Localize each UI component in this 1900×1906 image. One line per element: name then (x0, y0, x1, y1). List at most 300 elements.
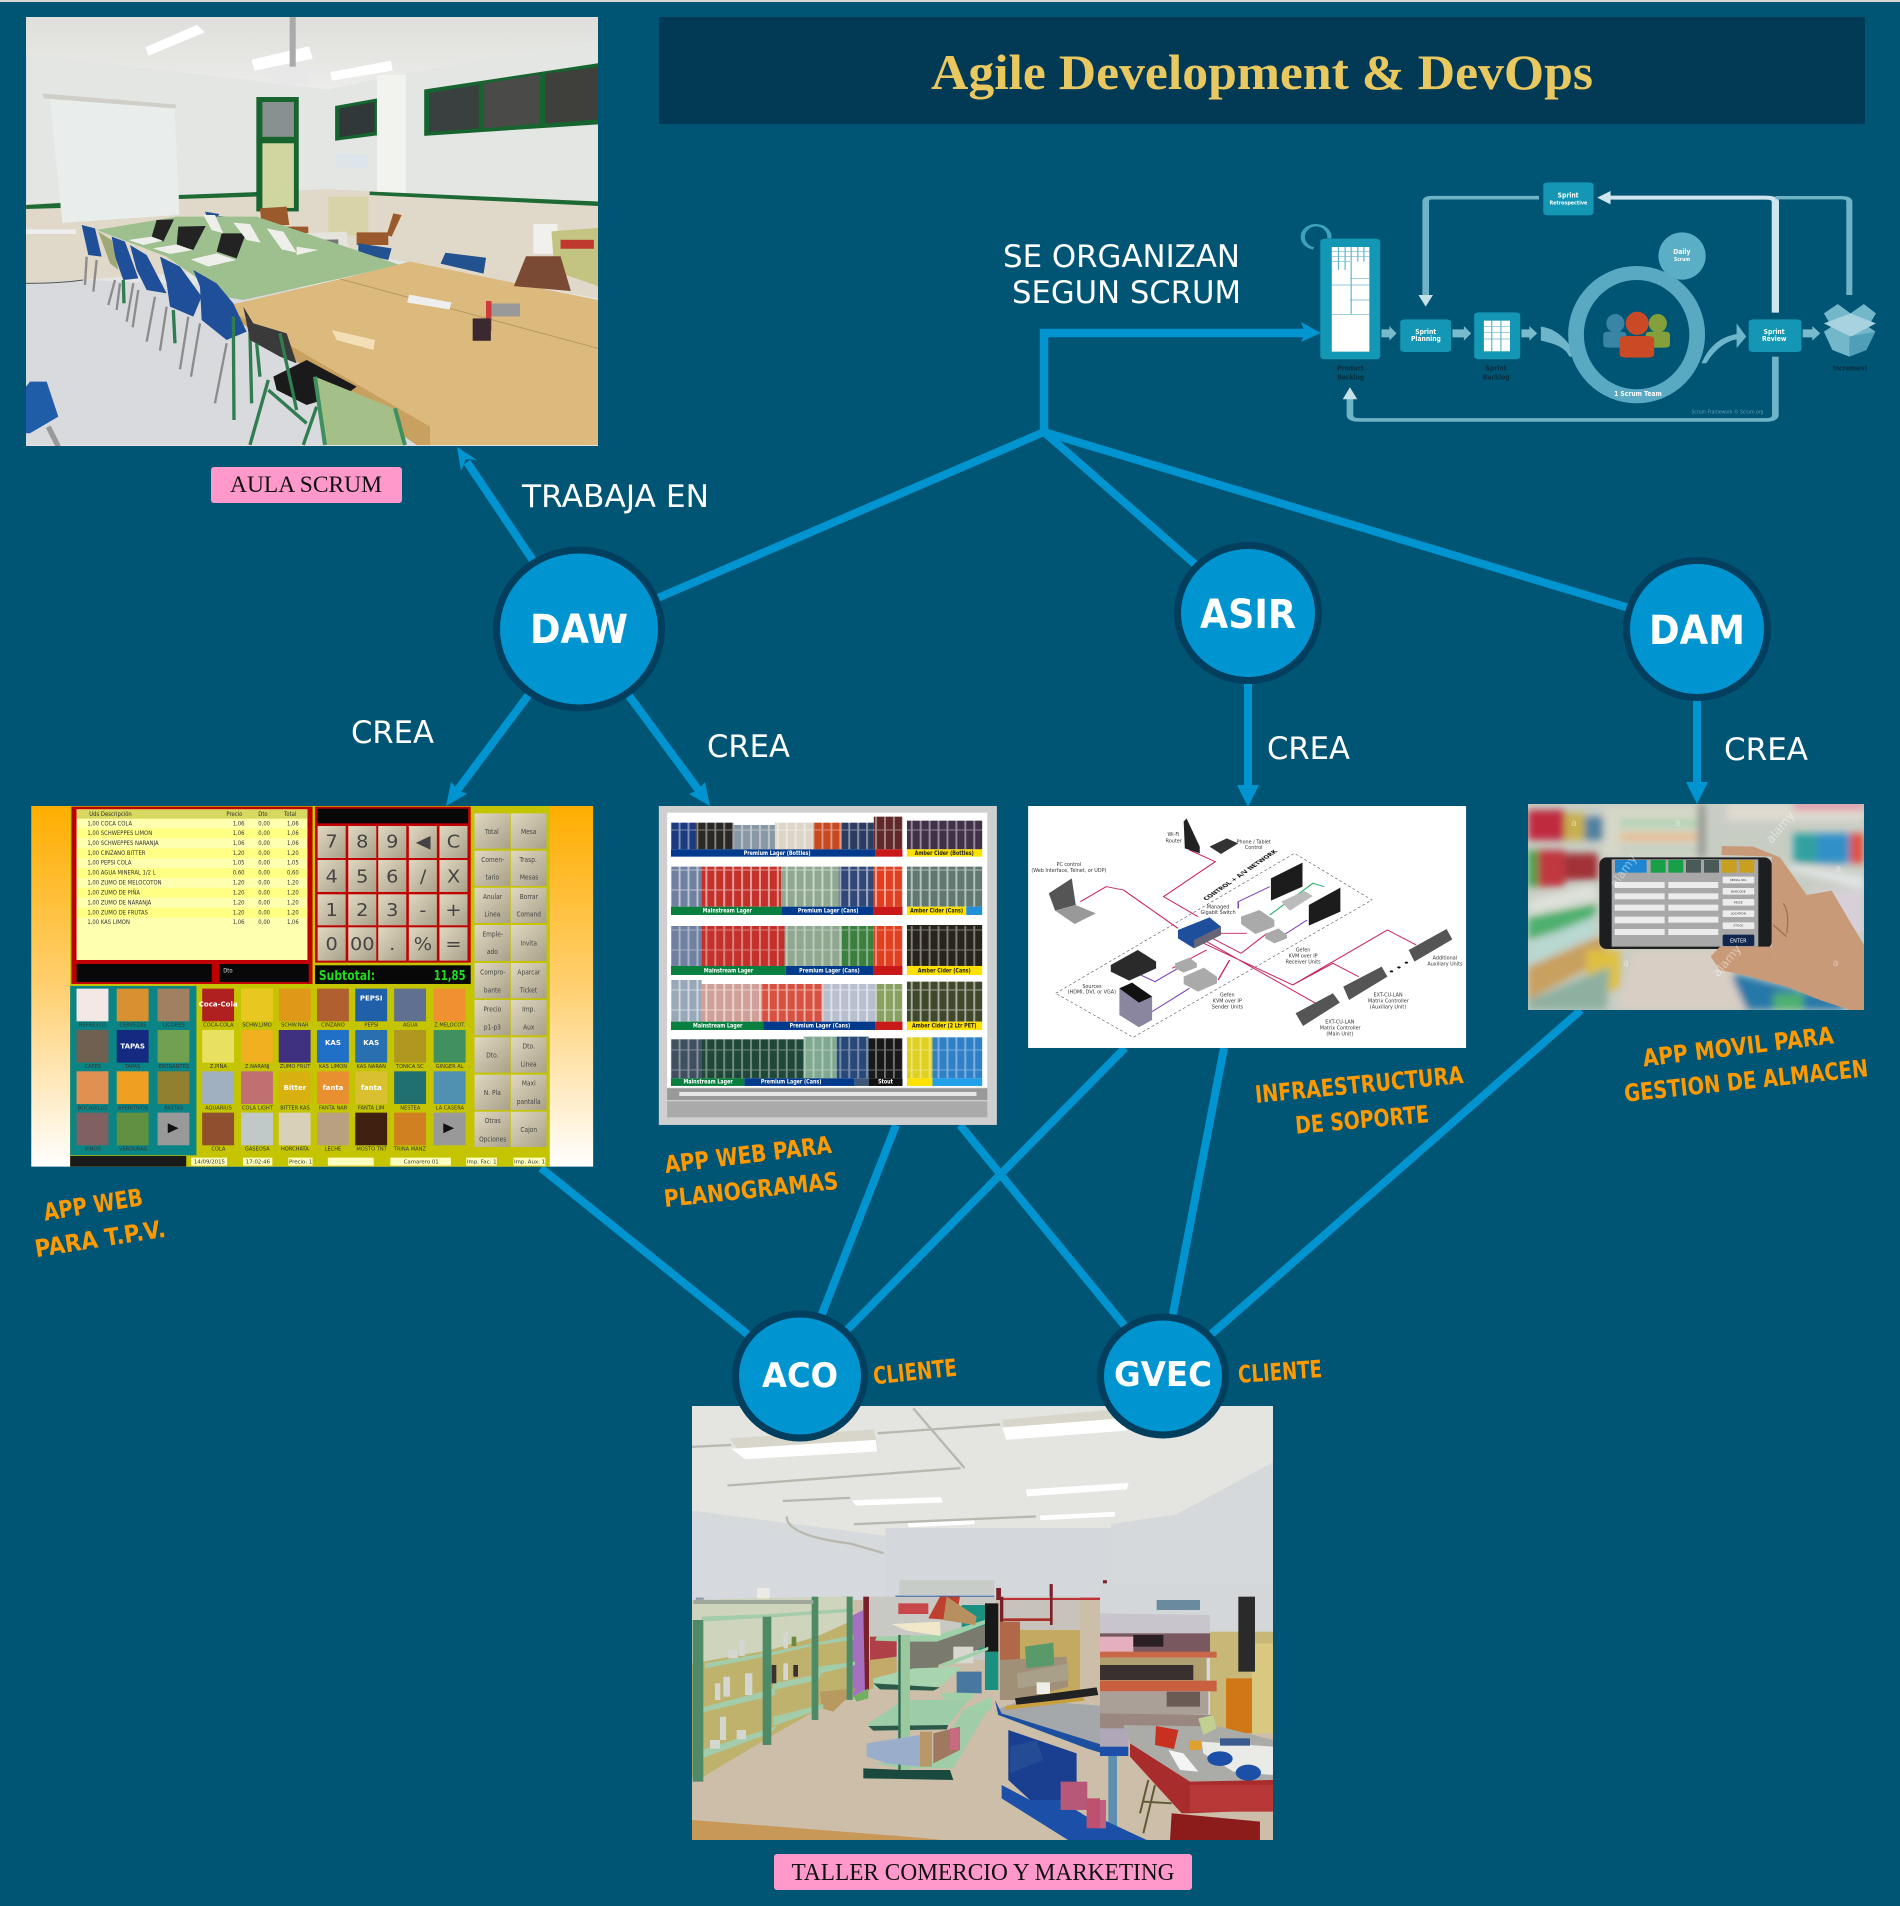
tpv keypad: 3 (386, 901, 398, 921)
tpv order list: 0,60 (287, 870, 299, 877)
image: tpv app screenshot: Linea (521, 1060, 537, 1069)
tpv keypad: C (447, 832, 460, 852)
sprint backlog: Backlog (1483, 373, 1510, 381)
image: tpv app screenshot: Anular (483, 892, 502, 901)
arrow: dam crea app movil (1686, 701, 1708, 804)
image: tpv app screenshot: Otras (485, 1116, 501, 1125)
scrum credit: Scrum Framework © Scrum.org (1692, 408, 1763, 415)
tpv order list: 1,06 (287, 920, 299, 926)
text: crea center left: CREA (707, 729, 790, 765)
image: tpv app screenshot (31, 806, 593, 1167)
stock photo watermarks: a (1835, 864, 1841, 875)
sprint backlog (1474, 312, 1520, 381)
tpv product tiles: SCHW.NAR (281, 1023, 309, 1029)
tpv order list (71, 807, 313, 984)
image: tpv app screenshot: Emple- (482, 930, 504, 939)
photo: taller comercio y marketing (692, 1406, 1273, 1843)
tpv product tiles: LICORES (163, 1023, 185, 1029)
text: se organizan segun scrum (1003, 239, 1241, 311)
tpv keypad: % (414, 935, 432, 955)
text: crea left: CREA (351, 715, 434, 751)
tpv product tiles: PEPSI (360, 993, 383, 1003)
image: tpv app screenshot: Aparcar (517, 968, 541, 977)
tpv keypad: = (445, 935, 462, 955)
label: taller comercio y marketing: TALLER COMERCIO Y MARKETING (792, 1860, 1174, 1886)
tpv product tiles: PEPSI (364, 1023, 379, 1029)
tpv order list: 1,20 (233, 851, 245, 857)
receiver units (1175, 910, 1287, 992)
tpv order list: 1,00 ZUMO DE MELOCOTON (87, 880, 162, 887)
shelf labels: Mainstream Lager (693, 1023, 743, 1030)
tpv order list: 1,20 (233, 900, 245, 907)
image: planogram shelves (659, 806, 997, 1125)
stock photo watermarks: alamy (1710, 942, 1744, 979)
classroom tables and chairs (26, 197, 598, 447)
tpv product tiles: KAS (325, 1038, 341, 1047)
hand (1722, 846, 1864, 1010)
tpv order list: 1,20 (233, 910, 245, 916)
arrow: daw crea planograma (624, 689, 710, 806)
displays (1271, 863, 1340, 926)
image: tpv app screenshot: bante (484, 986, 501, 995)
tpv product tiles: CINZANO (321, 1023, 345, 1029)
image: tpv app screenshot: Linea (484, 910, 500, 919)
gigabit switch: Gigabit Switch (1201, 910, 1236, 916)
tpv product tiles: fanta (361, 1083, 382, 1092)
scrum team ring: 1 Scrum Team (1614, 390, 1662, 398)
tpv status bar: Camarero 01 (404, 1160, 439, 1166)
tpv keypad: / (420, 867, 427, 887)
sprint retrospective: Sprint (1558, 191, 1579, 200)
scrum team ring (1568, 266, 1705, 403)
label: app web tpv (33, 1183, 168, 1263)
tablet: Phone / Tablet (1237, 839, 1271, 845)
tpv product tiles: NESTEA (400, 1105, 421, 1111)
tpv order list: 0,00 (258, 900, 270, 907)
back right cabinets and rolls (1000, 1597, 1080, 1630)
sprint backlog: Sprint (1486, 364, 1506, 372)
tpv order list: 1,00 ZUMO DE FRUTAS (87, 910, 148, 916)
shelf row 3 (671, 925, 982, 975)
tpv order list: 1,20 (287, 851, 299, 857)
tpv product tiles: COLA (211, 1147, 226, 1153)
back wall shelves (696, 1580, 1107, 1600)
daily scrum: Daily (1673, 248, 1691, 256)
image: tpv app screenshot: pantalla (517, 1097, 541, 1106)
shelf labels: Premium Lager (Cans) (799, 968, 860, 975)
tpv product tiles: CAFES (85, 1064, 102, 1070)
text: trabaja en: TRABAJA EN (521, 479, 709, 515)
node: ASIR: ASIR (1200, 592, 1296, 638)
tpv status bar: Imp. Fac: 1 (467, 1160, 497, 1166)
text: se organizan segun scrum: SE ORGANIZAN (1003, 239, 1240, 275)
image: tpv app screenshot: Borrar (520, 892, 538, 901)
planogram amber cider labels: Amber Cider (Cans) (910, 908, 964, 915)
sources: (HDMI, DVI, or VGA) (1068, 989, 1116, 995)
tpv product tiles (70, 986, 466, 1155)
arrow: daw crea tpv (446, 689, 533, 806)
tpv product tiles: Bitter (284, 1083, 307, 1092)
image: network infrastructure diagram (1028, 806, 1466, 1048)
planogram amber cider labels: Amber Cider (Cans) (918, 968, 971, 975)
image: mobile warehouse app (1528, 804, 1864, 1010)
tpv product tiles: COCA-COLA (203, 1023, 234, 1029)
image: tpv app screenshot: Comand (516, 910, 541, 919)
tpv keypad: - (419, 901, 426, 921)
tpv product tiles: GINGER AL (436, 1064, 464, 1070)
image: tpv app screenshot: Mesas (520, 873, 539, 882)
tpv product tiles: TONICA SC (395, 1064, 424, 1070)
label: app movil gestion de almacen: APP MOVIL PARA (1641, 1021, 1835, 1073)
image: tpv app screenshot: Total (484, 827, 499, 836)
room ceiling and walls (692, 1406, 1273, 1840)
product backlog: Product (1337, 364, 1364, 372)
tpv order list: 1,06 (287, 821, 299, 827)
tpv keypad: 9 (386, 832, 398, 852)
tpv order list: 0,60 (233, 870, 245, 877)
tpv keypad: 00 (350, 935, 375, 955)
network labels: KVM over IP (1289, 953, 1318, 959)
tpv status bar: Imp. Aux: 1 (514, 1160, 546, 1166)
network labels: Sender Units (1212, 1004, 1243, 1011)
tpv keypad: 2 (356, 901, 368, 921)
image: tpv app screenshot: Opciones (479, 1135, 507, 1144)
phone: BARCODE (1731, 889, 1746, 893)
tpv order list: 1,00 CINZANO BITTER (87, 851, 146, 857)
image: tpv app screenshot: Trasp. (519, 855, 537, 864)
tpv order list: 0,00 (258, 851, 270, 857)
label: aula scrum (211, 467, 402, 503)
shelf row 5 (671, 1037, 982, 1086)
tpv order list: 0,00 (258, 821, 270, 827)
node: GVEC (1097, 1314, 1229, 1438)
tpv product tiles: KAS NARAN (357, 1064, 386, 1070)
phone: ENTER (1730, 938, 1747, 944)
tpv order list: 1,20 (287, 900, 299, 907)
wifi router (1166, 818, 1200, 853)
network labels: Auxiliary Units (1427, 961, 1463, 968)
stock photo watermarks (1571, 809, 1841, 979)
tpv keypad: ◀ (416, 832, 431, 852)
stock photo watermarks: alamy (1763, 809, 1797, 846)
tpv product tiles: FANTA NAR (319, 1105, 348, 1111)
scrum team people (1603, 312, 1670, 358)
tpv status bar: Precio: 1 (289, 1160, 313, 1166)
tpv order list: 1,00 AGUA MINERAL 1/2 L (87, 870, 156, 877)
tpv product tiles: Z.PIÑA (210, 1063, 227, 1070)
stock photo watermarks: a (1623, 958, 1629, 969)
tpv product tiles: COLA LIGHT (242, 1105, 274, 1111)
matrix controllers (1296, 929, 1452, 1026)
tpv product tiles: LA CASERA (436, 1105, 464, 1111)
tpv order list: 1,20 (287, 890, 299, 897)
tpv order list: 1,05 (233, 860, 245, 867)
gigabit switch (1178, 904, 1236, 948)
tpv keypad: 4 (326, 867, 338, 887)
image: tpv app screenshot: p1-p3 (484, 1023, 501, 1032)
display counter glass (1123, 1725, 1273, 1782)
tpv order list: 0,00 (258, 831, 270, 837)
arrow: trabaja en (457, 447, 536, 565)
tpv order list: 1,06 (287, 831, 299, 837)
label: app web tpv: PARA T.P.V. (33, 1215, 168, 1263)
product backlog (1320, 239, 1380, 381)
tpv keypad: 5 (356, 867, 368, 887)
tpv order list: 1,06 (233, 831, 245, 837)
image: tpv app screenshot: Dto. (523, 1042, 535, 1051)
tpv order list: 1,06 (287, 841, 299, 847)
wifi router: Router (1166, 838, 1183, 844)
tpv product tiles: SCHW.LIMO (242, 1023, 272, 1029)
label: aula scrum: AULA SCRUM (230, 472, 382, 497)
image: tpv app screenshot: Imp. (522, 1005, 535, 1014)
tpv product tiles: fanta (323, 1083, 344, 1092)
tpv product tiles: KAS LIMON (319, 1064, 347, 1070)
phone: LOCATION (1731, 912, 1746, 916)
tpv order list: 1,00 ZUMO DE PIÑA (87, 889, 140, 897)
wood table edge (692, 1820, 943, 1840)
sprint review (1749, 319, 1801, 352)
tpv order list: 1,00 SCHWEPPES NARANJA (87, 841, 159, 847)
tpv order list: Dto (258, 812, 268, 818)
network labels: Matrix Controller (1320, 1025, 1361, 1031)
tpv order list: 1,06 (233, 821, 245, 827)
shelf labels: Mainstream Lager (704, 968, 753, 975)
tpv order list: 1,20 (287, 910, 299, 916)
tpv product tiles: Z.MELOCOT. (434, 1023, 466, 1029)
tpv order list: 1,00 SCHWEPPES LIMON (87, 831, 152, 837)
label: infraestructura de soporte: INFRAESTRUCTURA (1254, 1061, 1465, 1109)
tpv keypad: 0 (326, 935, 338, 955)
thumb (1711, 947, 1787, 987)
network labels: Receiver Units (1286, 959, 1321, 965)
text: se organizan segun scrum: SEGUN SCRUM (1012, 275, 1241, 311)
stock photo watermarks: alamy (1607, 852, 1640, 890)
tpv product tiles: BOCADILLO (78, 1105, 107, 1111)
label: app web planogramas: PLANOGRAMAS (663, 1167, 840, 1213)
arrow: hub to scrum framework (1044, 322, 1321, 432)
label: app movil gestion de almacen (1623, 1021, 1869, 1108)
tpv product tiles: HORCHATA (281, 1147, 309, 1153)
label: taller comercio y marketing (774, 1854, 1192, 1890)
network labels: Additional (1433, 955, 1457, 962)
shelf labels: Stout (878, 1079, 893, 1086)
network labels: EXT-CU-LAN (1325, 1019, 1354, 1025)
shelf row 4 (671, 980, 982, 1030)
tpv order list: 0,00 (258, 870, 270, 877)
laptop (1031, 862, 1106, 924)
tpv order list: 0,00 (258, 860, 270, 867)
tpv status bar: 14/09/2015 (194, 1160, 225, 1166)
phone: SERIAL NO. (1730, 878, 1747, 882)
tpv product tiles: FANTA LIM (358, 1105, 384, 1111)
photo: aula scrum classroom (26, 17, 598, 447)
stock photo watermarks: a (1833, 958, 1838, 969)
label: infraestructura de soporte: DE SOPORTE (1294, 1100, 1430, 1140)
node: ASIR (1174, 542, 1322, 684)
tpv keypad: 7 (326, 832, 338, 852)
shelf row 2 (671, 867, 982, 915)
tpv keypad: . (389, 935, 395, 955)
network labels (1212, 947, 1463, 1037)
title banner (659, 17, 1865, 124)
sources (1068, 950, 1156, 1027)
wifi router: Wi-Fi (1168, 832, 1179, 838)
image: tpv app screenshot: Cajon (520, 1125, 537, 1134)
sprint retrospective: Retrospective (1549, 200, 1588, 207)
tpv subtotal: Subtotal: (319, 968, 375, 983)
tpv order list: 1,05 (287, 860, 299, 867)
phone (1599, 857, 1772, 949)
image: tpv app screenshot: N. Pla (484, 1088, 501, 1097)
label: app web planogramas: APP WEB PARA (663, 1131, 834, 1179)
sprint review: Review (1762, 335, 1787, 343)
tpv product tiles: AGUA (403, 1023, 418, 1029)
shelf labels: Premium Lager (Cans) (790, 1023, 851, 1030)
tpv product tiles: APERITIVOS (118, 1105, 149, 1111)
sprint planning: Planning (1411, 335, 1441, 343)
tpv product tiles: Z.NARANJ (245, 1064, 270, 1070)
tpv product tiles: TAPAS (120, 1041, 145, 1050)
shelf row 1 (671, 817, 982, 857)
image: tpv app screenshot: Mesa (521, 827, 536, 836)
tpv product tiles: KAS (363, 1038, 379, 1047)
label: app web planogramas (663, 1131, 840, 1213)
tpv product tiles: PASTAS (164, 1105, 184, 1111)
tpv status bar (70, 1156, 546, 1167)
tpv product tiles: TAPAS (124, 1064, 141, 1070)
increment box (1824, 304, 1876, 372)
image: tpv app screenshot: 11,85 (434, 968, 466, 983)
tpv product tiles: BITTER KAS (280, 1105, 310, 1111)
tablet (1210, 838, 1271, 854)
phone: STOCK (1733, 924, 1744, 928)
tpv order list: 1,00 COCA COLA (87, 821, 132, 827)
node: GVEC: GVEC (1114, 1355, 1212, 1395)
tpv order list: Total (283, 812, 297, 818)
network labels: (Auxiliary Unit) (1370, 1004, 1406, 1011)
label: app web tpv: APP WEB (42, 1183, 145, 1227)
tablet: Control (1245, 845, 1262, 851)
tpv order list: 0,00 (258, 920, 270, 926)
label: infraestructura de soporte (1254, 1061, 1465, 1140)
tpv order list: 0,00 (258, 841, 270, 847)
tpv order list: 0,00 (258, 910, 270, 916)
tpv product tiles: GASEOSA (245, 1147, 270, 1153)
shelf labels: Premium Lager (Cans) (798, 908, 859, 915)
blue counter (1008, 1730, 1077, 1800)
text: crea right: CREA (1724, 732, 1808, 768)
sprint planning (1400, 319, 1451, 352)
tpv function buttons (475, 813, 547, 1147)
product backlog: Backlog (1337, 373, 1365, 381)
tpv order list: 1,00 KAS LIMON (87, 920, 130, 926)
tpv status bar: 17:02:46 (246, 1160, 271, 1166)
shelf labels (683, 851, 893, 1086)
tpv order list: 1,00 PEPSI COLA (87, 860, 132, 867)
text: crea center right: CREA (1267, 731, 1350, 767)
gondola (962, 1605, 998, 1690)
network labels: Gefen (1220, 992, 1235, 999)
laptop: PC control (1057, 862, 1081, 868)
tpv order list: 1,06 (233, 841, 245, 847)
planogram amber cider labels: Amber Cider (2 Ltr PET) (912, 1023, 977, 1030)
tpv product tiles: ZUMO FRUT (280, 1064, 311, 1070)
tpv keypad: 8 (356, 832, 368, 852)
tpv product tiles: AQUARIUS (205, 1105, 232, 1111)
stock photo watermarks: a (1571, 818, 1577, 829)
tpv order list: 1,06 (233, 920, 245, 926)
network labels: Gefen (1296, 947, 1310, 953)
image: tpv app screenshot: Maxi (522, 1079, 536, 1088)
daily scrum (1658, 232, 1706, 280)
node: DAM (1623, 557, 1771, 701)
network labels: (Main Unit) (1326, 1031, 1353, 1037)
tpv order list: 0,00 (258, 890, 270, 897)
node: DAM: DAM (1649, 608, 1745, 654)
node: DAW: DAW (530, 607, 628, 653)
shelving and floor (692, 1597, 1113, 1843)
label: cliente aco: CLIENTE (872, 1354, 958, 1390)
tpv product tiles: CERVEZAS (120, 1023, 147, 1029)
tpv order list: Precio (226, 812, 243, 818)
sprint planning: Sprint (1415, 328, 1436, 336)
tpv order list: 1,00 ZUMO DE NARANJA (87, 900, 151, 907)
increment box: Increment (1832, 364, 1867, 372)
image: tpv app screenshot: Precio (483, 1005, 501, 1014)
tpv keypad: X (447, 867, 460, 887)
tpv product tiles: VINOS (85, 1147, 102, 1153)
tpv product tiles: LECHE (325, 1147, 341, 1153)
planogram amber cider labels: Amber Cider (Bottles) (915, 851, 974, 857)
node: DAW (493, 546, 665, 712)
image: tpv app screenshot: Compro- (480, 968, 506, 977)
laptop: (Web Interface, Telnet, or UDP) (1031, 868, 1106, 874)
shelf labels: Mainstream Lager (683, 1079, 733, 1086)
tpv product tiles: TRINA MANZ (393, 1147, 426, 1153)
node: ACO: ACO (762, 1356, 838, 1396)
tpv order list: 0,00 (258, 880, 270, 887)
stock photo watermarks: a (1675, 818, 1681, 829)
tpv product tiles: MOSTO TNT (356, 1147, 388, 1153)
daily scrum: Scrum (1674, 257, 1690, 263)
phone: PRICE (1734, 900, 1743, 904)
tpv order list: 1,20 (233, 880, 245, 887)
label: cliente gvec: CLIENTE (1237, 1355, 1323, 1389)
image: tpv app screenshot: tario (486, 873, 499, 882)
image: tpv app screenshot: Invita (520, 939, 537, 948)
tpv keypad: 6 (386, 867, 398, 887)
tpv product tiles: VERDURAS (119, 1147, 148, 1153)
tpv keypad (315, 807, 471, 963)
network labels: Matrix Controller (1368, 998, 1410, 1005)
tpv keypad: 1 (326, 901, 338, 921)
title: Agile Development & DevOps (931, 44, 1593, 100)
node: ACO (732, 1310, 868, 1442)
client connector lines (541, 1010, 1581, 1337)
tpv order list: Dto (223, 968, 233, 974)
shelf labels: Premium Lager (Bottles) (744, 851, 811, 857)
tpv order list: 1,20 (287, 880, 299, 887)
shelf labels: Mainstream Lager (703, 908, 752, 915)
sprint review: Sprint (1764, 328, 1785, 336)
right side rack and display counter (1100, 1583, 1273, 1840)
planogram amber cider labels (910, 851, 977, 1030)
shelf labels: Premium Lager (Cans) (761, 1079, 822, 1086)
arrow: asir crea infraestructura (1237, 684, 1259, 807)
image: tpv app screenshot: Ticket (519, 986, 537, 995)
tpv keypad: + (445, 901, 462, 921)
